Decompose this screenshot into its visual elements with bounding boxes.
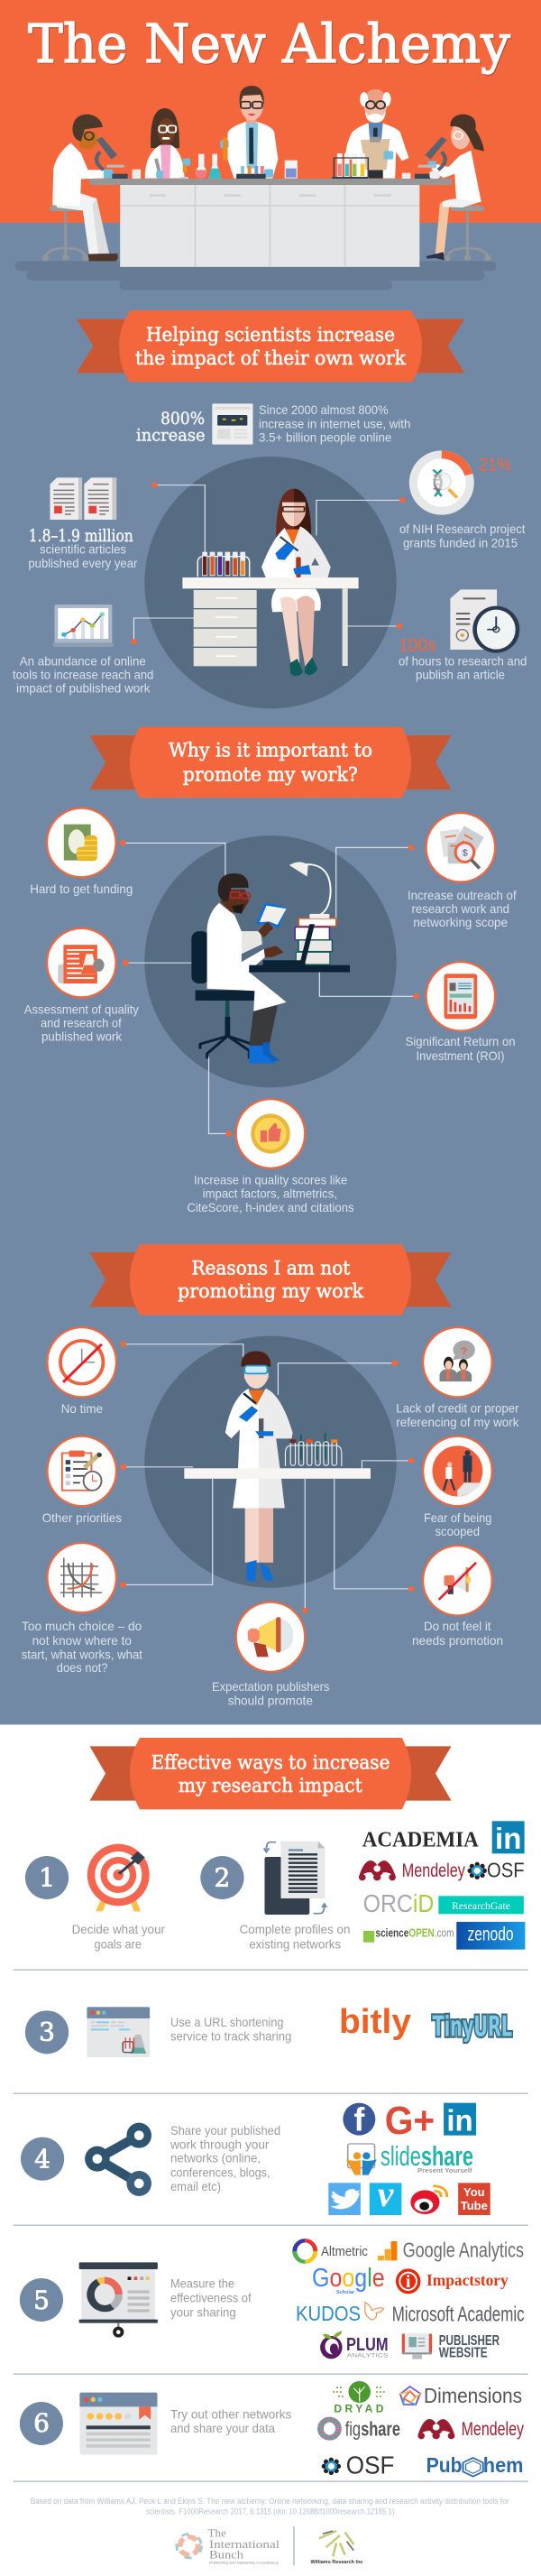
- logos: measurement tools: KUDOS: [296, 2302, 361, 2325]
- logos: networks: [359, 1821, 525, 1950]
- item: other priorities: [42, 1436, 126, 1525]
- item: increase outreach: $: [463, 849, 468, 858]
- ribbon heading: my research impact: [179, 1775, 362, 1796]
- logos: data sharing: Mendeley: [462, 2419, 524, 2440]
- item: return on investment: [406, 962, 516, 1063]
- logos: measurement tools: Google: [312, 2264, 385, 2293]
- logos: networks: ACADEMIA: [362, 1829, 479, 1852]
- item: assessment of quality: published work: [41, 1029, 123, 1044]
- item: assessment of quality: and research of: [41, 1016, 122, 1030]
- stat: 800% increase: increase in internet use, with: [259, 416, 410, 430]
- logos: social networks: G+: [385, 2099, 435, 2143]
- stat: 21% NIH grants: [399, 450, 525, 549]
- item: lack of credit: referencing of my work: [396, 1415, 519, 1429]
- logos: measurement tools: Scholar: [336, 2290, 354, 2295]
- stat: 800% increase: Since 2000 almost 800%: [259, 402, 388, 417]
- step 2: [200, 1842, 350, 1951]
- item: return on investment: Investment (ROI): [417, 1048, 505, 1063]
- item: no time: [47, 1327, 126, 1416]
- item: fear of being scooped: Fear of being: [424, 1510, 491, 1525]
- stat: 100s of hours: 100s: [399, 636, 436, 656]
- item: too much choice: does not?: [57, 1660, 108, 1675]
- logos: measurement tools: WEBSITE: [439, 2345, 488, 2360]
- ribbon heading: [77, 310, 464, 382]
- scientist right with microscope: [415, 115, 491, 261]
- item: do not feel it needs promotion: needs promotion: [412, 1633, 503, 1648]
- logos: social networks: Present Yourself: [417, 2168, 472, 2174]
- scientist professor with clipboard: [345, 89, 408, 179]
- logos: measurement tools: i: [406, 2272, 411, 2292]
- step 4: networks (online,: [170, 2151, 261, 2165]
- logos: data sharing: OSF: [346, 2451, 394, 2479]
- stat: 800% increase: 800%: [160, 409, 205, 429]
- item: increase outreach: networking scope: [413, 915, 508, 929]
- step 4: work through your: [170, 2137, 270, 2151]
- step 1: [25, 1844, 165, 1951]
- stat: online tools: impact of published work: [16, 681, 151, 696]
- footer citation: [31, 2497, 509, 2516]
- row dividers: [13, 1969, 528, 2482]
- stat: 21% NIH grants: of NIH Research project: [399, 522, 525, 536]
- item: lack of credit: ?: [461, 1345, 467, 1357]
- step 2: 2: [214, 1863, 230, 1893]
- stat: 100s of hours: [399, 589, 527, 682]
- ribbon heading: promoting my work: [178, 1280, 363, 1302]
- ribbon heading: the impact of their own work: [135, 347, 406, 369]
- step 6: [20, 2393, 291, 2455]
- stat: 1.8-1.9 million articles: 1.8–1.9 million: [29, 526, 133, 546]
- logos: social networks: slideshare: [381, 2140, 473, 2172]
- logos: measurement tools: ANALYTICS: [346, 2353, 389, 2359]
- stat: 1.8-1.9 million articles: published every year: [28, 556, 138, 570]
- footer citation: scientists. F1000Research 2017, 6:1315 (doi: 10.12688/f1000research.12185.1): [146, 2507, 394, 2516]
- central circle with scientist reading: [123, 836, 416, 1133]
- item: fear of being scooped: scooped: [435, 1524, 480, 1538]
- item: too much choice: [22, 1543, 142, 1675]
- footer citation: Based on data from Williams AJ, Peck L and Ekins S. The new alchemy: Online networking, data sharing and research activity distribution tools for: [31, 2497, 509, 2506]
- logos: social networks: in: [446, 2104, 473, 2137]
- item: assessment of quality: [24, 928, 139, 1044]
- logos: measurement tools: PLUM: [346, 2335, 388, 2355]
- logos: social networks: You: [463, 2185, 485, 2199]
- item: quality scores: Increase in quality scores like: [194, 1173, 347, 1187]
- title: The New Alchemy: [28, 13, 511, 75]
- panel: reasons not promoting: [22, 1244, 519, 1707]
- logos: data sharing: [320, 2381, 524, 2479]
- stat: 21% NIH grants: 21%: [479, 456, 511, 475]
- logos: networks: in: [495, 1822, 521, 1855]
- item: hard to get funding: [30, 808, 133, 896]
- logos: measurement tools: Impactstory: [426, 2271, 509, 2289]
- logos: social networks: f: [353, 2101, 365, 2138]
- step 2: existing networks: [249, 1936, 341, 1951]
- stat: 100s of hours: of hours to research and: [399, 654, 527, 669]
- header panel: [0, 0, 541, 290]
- step 2: Complete profiles on: [240, 1922, 350, 1936]
- ribbon heading: Why is it important to: [169, 740, 372, 762]
- panel: effective ways: [13, 1738, 528, 2565]
- step 1: Decide what your: [72, 1922, 165, 1936]
- item: assessment of quality: Assessment of quality: [24, 1002, 139, 1017]
- logos: data sharing: DRYAD: [334, 2402, 384, 2414]
- stat: 1.8-1.9 million articles: scientific articles: [40, 542, 126, 557]
- footer logos: [177, 2526, 363, 2565]
- item: expectation publishers: Expectation publishers: [212, 1679, 329, 1694]
- central circle with scientist standing: [124, 1336, 411, 1611]
- stat: 1.8-1.9 million articles: [28, 477, 138, 570]
- step 4: Share your published: [170, 2123, 280, 2137]
- stat: 800% increase: 3.5+ billion people online: [259, 430, 392, 445]
- item: quality scores: impact factors, altmetrics,: [203, 1186, 337, 1200]
- ribbon heading: [89, 1244, 452, 1316]
- item: no time: No time: [61, 1401, 103, 1416]
- item: return on investment: Significant Return on: [406, 1034, 516, 1048]
- step 3: [25, 2007, 291, 2057]
- step 4: 4: [34, 2145, 50, 2174]
- logos: networks: scienceOPEN.com: [375, 1927, 454, 1940]
- logos: measurement tools: PUBLISHER: [439, 2333, 500, 2349]
- step 3: 3: [39, 2017, 55, 2047]
- logos: data sharing: Dimensions: [424, 2384, 522, 2407]
- step 5: [20, 2262, 252, 2338]
- item: too much choice: start, what works, what: [22, 1647, 142, 1661]
- logos: data sharing: Pub: [426, 2453, 463, 2477]
- item: expectation publishers: should promote: [228, 1693, 313, 1707]
- footer logos: International: [209, 2537, 280, 2551]
- ribbon heading: Reasons I am not: [191, 1258, 351, 1279]
- footer logos: The: [207, 2526, 226, 2540]
- step 1: goals are: [94, 1936, 142, 1951]
- step 6: 6: [33, 2408, 50, 2438]
- item: quality scores: CiteScore, h-index and citations: [187, 1200, 354, 1214]
- item: other priorities: Other priorities: [42, 1510, 122, 1525]
- stat: 100s of hours: publish an article: [416, 668, 505, 682]
- ribbon heading: [89, 1738, 452, 1809]
- step 3: Use a URL shortening: [170, 2015, 283, 2029]
- item: quality scores: [187, 1099, 354, 1214]
- scientist with pink shirt: [145, 108, 190, 179]
- item: increase outreach: research work and: [411, 901, 509, 916]
- step 6: and share your data: [170, 2421, 275, 2435]
- ribbon heading: [89, 727, 452, 798]
- ribbon heading: Effective ways to increase: [151, 1751, 390, 1773]
- step 1: 1: [39, 1863, 55, 1893]
- test tube rack: [332, 153, 410, 179]
- stat: 800% increase: increase: [136, 426, 206, 446]
- panel: why promote: [24, 727, 517, 1214]
- step 5: 5: [33, 2285, 50, 2315]
- step 4: conferences, blogs,: [170, 2165, 270, 2180]
- logos: networks: ORCiD: [363, 1889, 434, 1917]
- scientist centre with tie: [220, 86, 278, 179]
- scientist left: [42, 115, 141, 261]
- logos: social networks: Tube: [461, 2199, 488, 2212]
- footer logos: Publishing and Marketing Consultancy: [209, 2561, 279, 2565]
- item: lack of credit: [391, 1327, 519, 1429]
- item: too much choice: not know where to: [32, 1633, 132, 1648]
- footer logos: Bunch: [209, 2547, 244, 2561]
- item: hard to get funding: Hard to get funding: [30, 882, 133, 896]
- step 6: Try out other networks: [170, 2407, 291, 2422]
- item: too much choice: Too much choice – do: [22, 1619, 142, 1633]
- logos: data sharing: figshare: [345, 2417, 400, 2440]
- item: do not feel it needs promotion: [408, 1546, 503, 1648]
- central circle with scientist at desk: [131, 457, 406, 708]
- illustration: scientists at lab bench: [14, 86, 496, 290]
- step 3: service to track sharing: [170, 2029, 291, 2044]
- logos: bitly and TinyURL: bitly: [339, 2003, 411, 2041]
- logos: networks: Mendeley: [402, 1860, 465, 1881]
- item: fear of being scooped: [408, 1436, 492, 1538]
- logos: networks: OSF: [487, 1858, 525, 1881]
- stat: 800% increase: [136, 402, 410, 446]
- item: increase outreach: [408, 813, 517, 929]
- stat: 21% NIH grants: grants funded in 2015: [403, 535, 518, 549]
- ribbon heading: promote my work?: [183, 763, 358, 785]
- logos: bitly and TinyURL: [339, 2003, 512, 2044]
- stat: online tools: [13, 605, 153, 696]
- step 4: email etc): [170, 2179, 221, 2193]
- stat: online tools: An abundance of online: [20, 654, 146, 669]
- flasks and beaker: [196, 154, 298, 179]
- item: expectation publishers: [212, 1602, 329, 1707]
- step 4: [21, 2123, 280, 2196]
- logos: networks: ResearchGate: [452, 1899, 510, 1912]
- logos: networks: zenodo: [467, 1925, 514, 1945]
- logos: social networks: [328, 2099, 491, 2215]
- item: lack of credit: Lack of credit or proper: [396, 1400, 519, 1415]
- item: do not feel it needs promotion: Do not feel it: [424, 1619, 491, 1633]
- panel: helping scientists: [13, 310, 527, 708]
- stat: online tools: tools to increase reach and: [13, 668, 153, 682]
- step 5: Measure the: [170, 2276, 234, 2291]
- footer logos: Williams Research Inc: [310, 2560, 363, 2565]
- item: increase outreach: Increase outreach of: [408, 888, 517, 902]
- logos: social networks: v: [378, 2174, 395, 2214]
- logos: measurement tools: Altmetric: [321, 2244, 368, 2259]
- ribbon heading: Helping scientists increase: [146, 324, 395, 346]
- logos: data sharing: hem: [483, 2453, 523, 2477]
- step 5: your sharing: [170, 2304, 236, 2319]
- step 5: effectiveness of: [170, 2291, 252, 2305]
- logos: measurement tools: [295, 2239, 525, 2360]
